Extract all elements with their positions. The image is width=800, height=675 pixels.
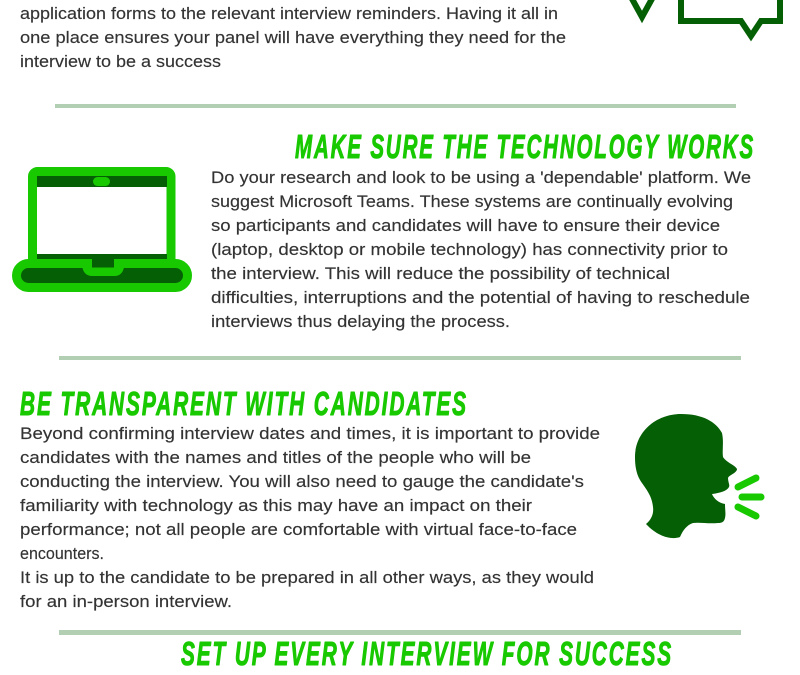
panel: technology text: suggest Microsoft Teams. These systems are continually evolving [211, 192, 733, 211]
panel: technology text: (laptop, desktop or mobile technology) has connectivity prior to [211, 240, 728, 259]
icon: speech bubbles [631, 0, 780, 36]
panel: technology text [211, 168, 751, 331]
heading: be transparent with candidates: BE TRANSPARENT WITH CANDIDATES [20, 385, 468, 422]
panel: transparency text: It is up to the candidate to be prepared in all other ways, as they would [20, 568, 594, 587]
panel: technology text: Do your research and look to be using a 'dependable' platform. We [211, 168, 751, 187]
panel: intro text continuation [20, 4, 566, 71]
panel: transparency text: familiarity with technology as this may have an impact on their [20, 496, 532, 515]
panel: technology text: difficulties, interruptions and the potential of having to reschedule [211, 288, 750, 307]
panel: transparency text: Beyond confirming interview dates and times, it is important to provide [20, 424, 600, 443]
panel: technology text: the interview. This will reduce the possibility of technical [211, 264, 670, 283]
panel: transparency text: encounters. [20, 544, 104, 563]
panel: intro text continuation: one place ensures your panel will have everything they need for the [20, 28, 566, 47]
panel: intro text continuation: interview to be a success [20, 52, 221, 71]
panel: transparency text: conducting the interview. You will also need to gauge the candidate's [20, 472, 584, 491]
panel: transparency text: performance; not all people are comfortable with virtual face-to-face [20, 520, 577, 539]
panel: technology text: so participants and candidates will have to ensure their device [211, 216, 720, 235]
panel: transparency text: candidates with the names and titles of the people who will be [20, 448, 531, 467]
panel: transparency text: for an in-person interview. [20, 592, 232, 611]
icon: speaking head [635, 414, 761, 538]
panel: technology text: interviews thus delaying the process. [211, 312, 510, 331]
icon: laptop [16, 172, 188, 288]
panel: transparency text [20, 424, 600, 611]
panel: intro text continuation: application forms to the relevant interview reminders. Having it all in [20, 4, 558, 23]
